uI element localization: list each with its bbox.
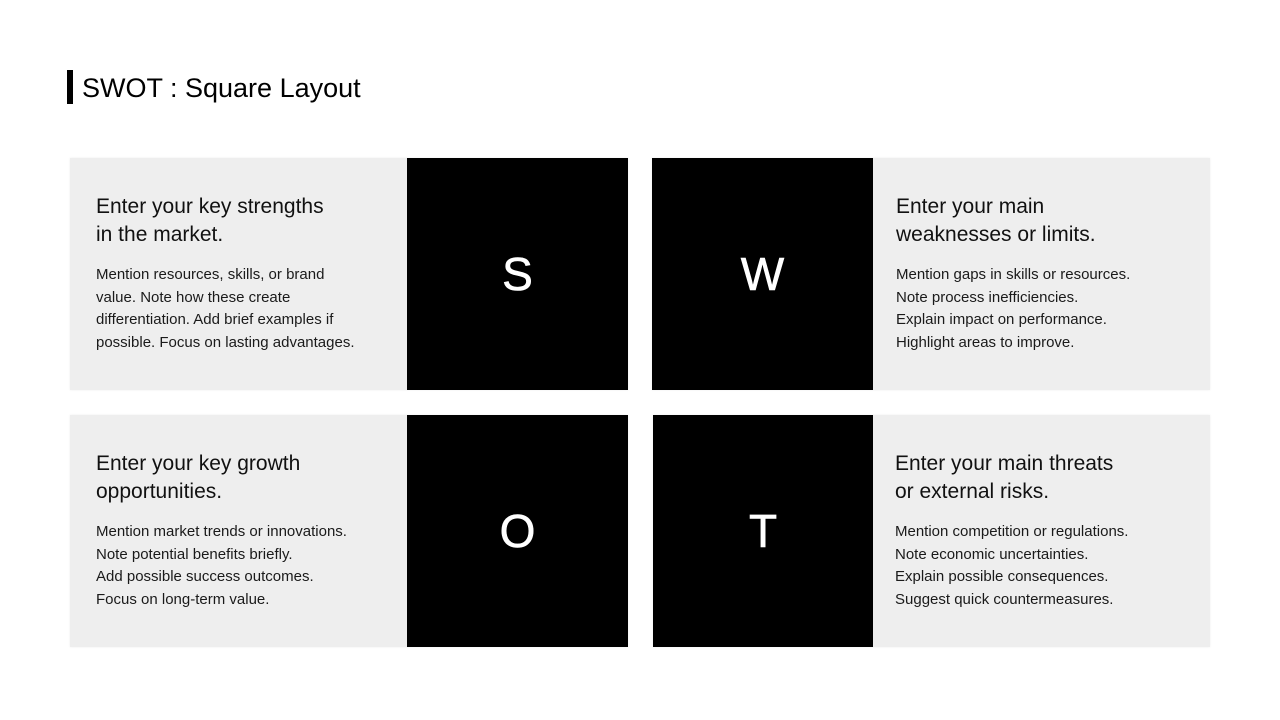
letter block: O: O: [500, 505, 535, 557]
title: SWOT : Square Layout: [82, 73, 361, 103]
text: opportunities: Add possible success outcomes.: [96, 568, 314, 585]
text: opportunities: opportunities.: [96, 480, 222, 503]
text: weaknesses: [896, 195, 1130, 351]
letter block: O: [407, 415, 628, 647]
text: threats: Suggest quick countermeasures.: [895, 591, 1113, 608]
letter block: W: W: [741, 248, 784, 300]
text: opportunities: Note potential benefits briefly.: [96, 546, 293, 563]
letter block: T: [653, 415, 873, 647]
text: strengths: Mention resources, skills, or brand: [96, 266, 324, 283]
text: threats: or external risks.: [895, 480, 1049, 503]
panel: weaknesses: [652, 158, 1210, 390]
text: weaknesses: Explain impact on performance.: [896, 311, 1107, 328]
text: strengths: possible. Focus on lasting advantages.: [96, 334, 354, 351]
text: weaknesses: weaknesses or limits.: [896, 223, 1096, 246]
text: opportunities: [96, 452, 347, 608]
text: opportunities: Mention market trends or innovations.: [96, 523, 347, 540]
letter block: T: T: [749, 505, 777, 557]
text: strengths: [96, 195, 354, 351]
text: weaknesses: Highlight areas to improve.: [896, 334, 1074, 351]
panel: strengths: [70, 158, 628, 390]
text: threats: Note economic uncertainties.: [895, 546, 1088, 563]
panel: threats: [653, 415, 1210, 647]
text: threats: Mention competition or regulations.: [895, 523, 1128, 540]
text: threats: Explain possible consequences.: [895, 568, 1108, 585]
text: threats: [895, 452, 1128, 608]
text: strengths: in the market.: [96, 223, 223, 246]
text: weaknesses: Enter your main: [896, 195, 1044, 218]
text: strengths: value. Note how these create: [96, 289, 290, 306]
text: opportunities: Focus on long-term value.: [96, 591, 269, 608]
text: weaknesses: Mention gaps in skills or resources.: [896, 266, 1130, 283]
text: strengths: differentiation. Add brief examples if: [96, 311, 333, 328]
text: threats: Enter your main threats: [895, 452, 1113, 475]
panel: opportunities: [70, 415, 628, 647]
text: weaknesses: Note process inefficiencies.: [896, 289, 1078, 306]
letter block: S: [407, 158, 628, 390]
letter block: W: [652, 158, 873, 390]
letter block: S: S: [502, 248, 533, 300]
text: opportunities: Enter your key growth: [96, 452, 300, 475]
text: strengths: Enter your key strengths: [96, 195, 324, 218]
